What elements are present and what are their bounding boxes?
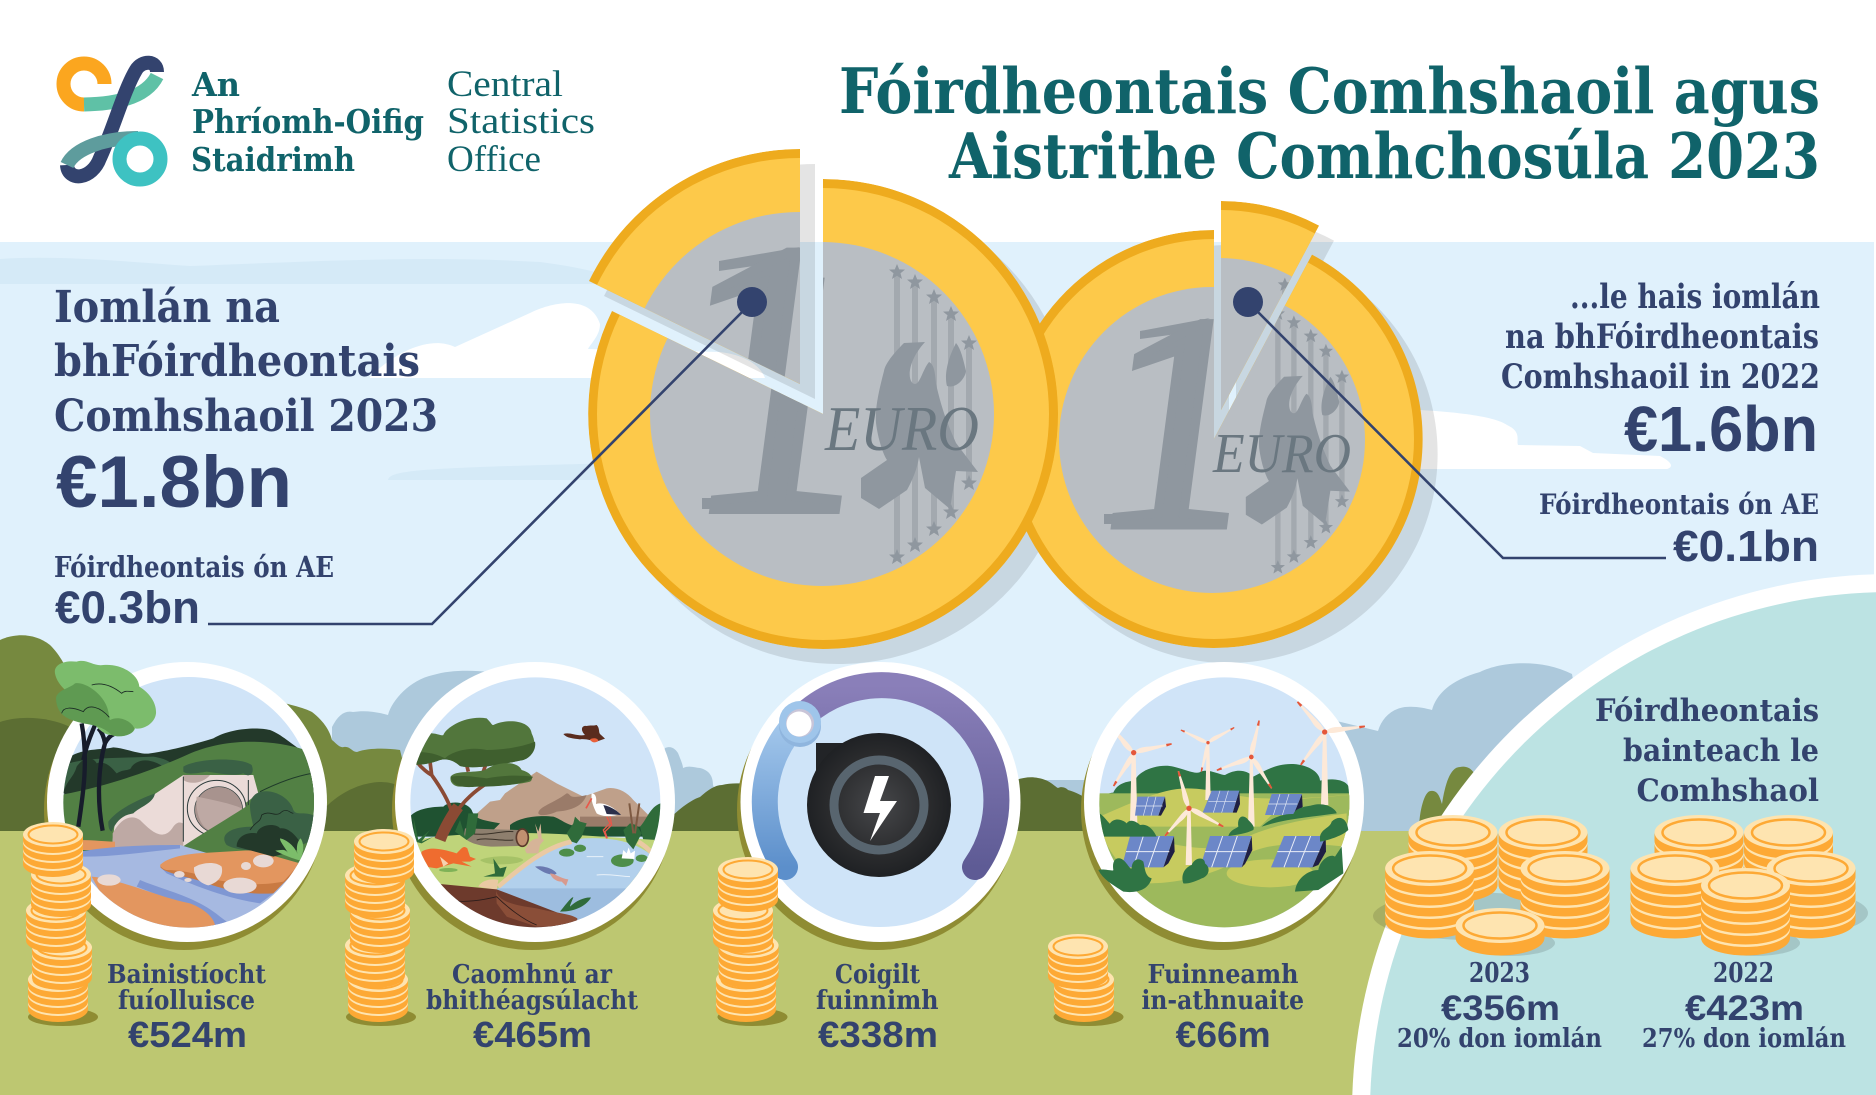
logo text Irish: Phríomh-Oifig [192,102,424,141]
text block: total 2023: Comhshaoil 2023 [54,391,438,442]
coin 2022 main body: EURO [1212,423,1351,485]
coin stack: biodiversity €465m [345,829,416,1026]
wind turbine front [1163,771,1225,865]
panel: related environment subsidies background [1352,574,1876,1095]
logo mark [64,63,160,180]
logo text Irish: An [191,65,240,104]
label: renewable energy: Fuinneamh [1148,960,1299,990]
label 2022 [1642,958,1846,1054]
scene: biodiversity [392,662,675,950]
label: renewable energy: €66m [1176,1014,1271,1055]
tree in front of frame [55,661,156,831]
coin 2022 slice: EU share [1221,201,1319,410]
label: energy saving [816,960,939,1055]
text block: total 2023: Iomlán na [54,282,280,333]
text block: total 2022 [1501,277,1820,571]
sky background [0,242,1874,842]
distant blue cloud hills [332,663,1600,831]
label: energy saving: €338m [818,1014,938,1055]
scene: energy saving [737,662,1020,950]
title [839,54,1820,193]
label: wastewater: Bainistíocht [107,960,266,990]
ground [0,831,1876,1095]
coin piles 2022 [1630,815,1868,956]
text block: total 2022: Comhshaoil in 2022 [1501,357,1820,397]
text block: total 2023 [54,282,438,633]
text block: total 2023: Fóirdheontais ón AE [54,550,334,584]
label 2023: 2023 [1469,958,1530,989]
leader line 2023 [208,302,752,624]
label: biodiversity: €465m [473,1014,592,1055]
coin 2023 main body: EURO [824,393,979,464]
label: wastewater: fuíolluisce [118,986,255,1016]
coin shadows [603,164,1438,664]
text block: total 2023: bhFóirdheontais [54,336,420,387]
coin piles 2023 [1373,815,1610,956]
label: wastewater [107,960,266,1055]
sky haze bands [0,258,640,480]
bird [563,725,605,742]
label: energy saving: Coigilt [835,960,920,990]
panel heading: bainteach le [1623,733,1819,769]
label 2022: 2022 [1713,958,1774,989]
label: biodiversity: Caomhnú ar [452,960,612,990]
logo text English: Central [447,64,563,105]
marker dot 2023 [737,287,767,317]
text block: total 2022: Fóirdheontais ón AE [1539,488,1819,521]
label: biodiversity [426,960,638,1055]
green hills [0,635,1480,831]
logo text Irish: Staidrimh [191,140,355,179]
clouds [370,303,1671,469]
text block: total 2022: €0.1bn [1673,522,1819,571]
header logo [64,63,595,180]
label: renewable energy: in-athnuaite [1142,986,1304,1016]
text block: total 2023: €1.8bn [56,442,292,523]
logo text Irish [191,65,424,179]
logo text English: Statistics [447,101,595,142]
wind turbines back [1106,700,1365,827]
coin 2022 main body [1005,230,1423,648]
label 2022: 27% don iomlán [1642,1024,1846,1054]
label 2023: €356m [1441,989,1560,1028]
coin stack: energy saving €338m [713,857,788,1026]
text block: total 2022: ...le hais iomlán [1570,277,1820,317]
label 2022: €423m [1685,989,1804,1028]
coin 2023 main body [588,179,1058,649]
coin 2023 slice: EU share [589,149,800,384]
gauge arc [765,685,996,867]
text block: total 2022: na bhFóirdheontais [1505,317,1819,357]
label: renewable energy [1142,960,1304,1055]
label 2023 [1397,958,1602,1054]
label 2023: 20% don iomlán [1397,1024,1602,1054]
marker dot 2022 [1233,287,1263,317]
label: energy saving: fuinnimh [816,986,939,1016]
leader line 2022 [1248,302,1666,558]
text block: total 2023: €0.3bn [55,582,200,633]
bushes [1098,804,1348,892]
scene: wastewater [44,661,327,950]
logo text English: Office [447,139,541,180]
solar panels [1122,791,1326,867]
dial with bolt [807,733,951,877]
scene: renewable energy [1081,662,1365,950]
gauge knob [779,701,821,747]
coin 2023 slice: EU share: 1 [651,173,873,554]
coin stack: renewable €66m [1048,934,1124,1026]
text block: total 2022: €1.6bn [1624,393,1818,465]
label: biodiversity: bhithéagsúlacht [426,986,638,1016]
panel heading: Comhshaol [1636,773,1819,809]
coin stack: wastewater €524m [23,822,98,1026]
coin 2022 main body: 1 [1080,254,1277,592]
panel heading: Fóirdheontais [1595,693,1819,729]
logo text English [447,64,595,180]
coin 2023 main body: 1 [674,203,896,584]
panel heading [1595,693,1819,809]
label: wastewater: €524m [128,1014,247,1055]
